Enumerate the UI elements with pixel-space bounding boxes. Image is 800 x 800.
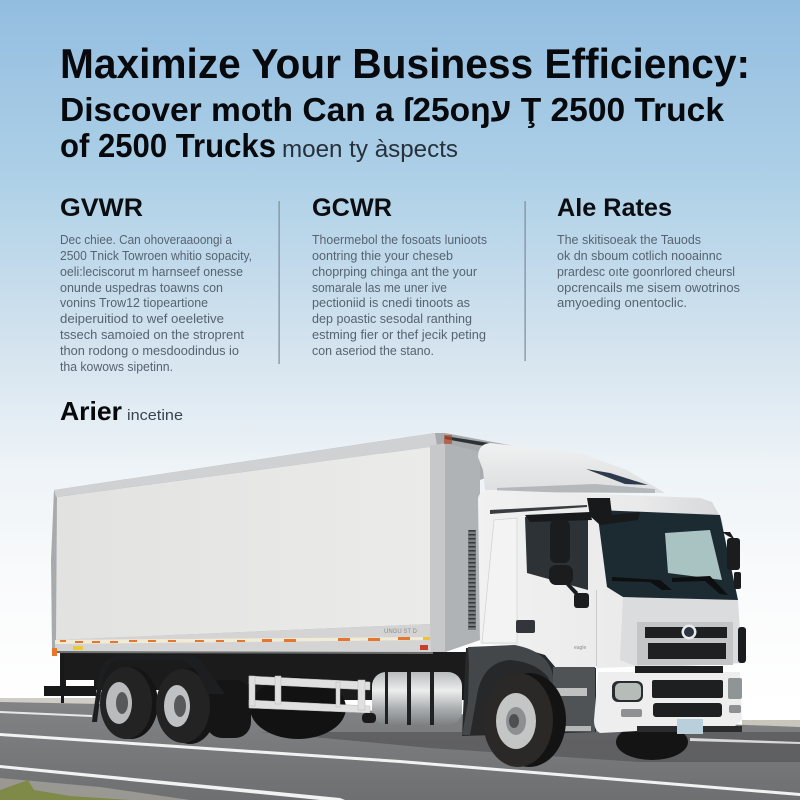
model text: eagle: [574, 645, 586, 651]
column: GCWR: estming fier or thef jecik peting: [312, 328, 486, 342]
column: Ale Rates: ok dn sboum cotlich nooainnc: [557, 249, 722, 263]
front wheel: [483, 673, 566, 767]
column: GVWR: GVWR: [60, 194, 143, 222]
rear fender: [92, 655, 225, 722]
column: Ale Rates: [557, 194, 740, 310]
column: Ale Rates: opcrencails me sisem owotrinos: [557, 281, 740, 295]
title: [60, 40, 750, 164]
door handle: [516, 620, 535, 633]
cab: [478, 443, 746, 668]
roof fairing: [478, 443, 665, 493]
column: GCWR: con aseriod the stano.: [312, 344, 434, 358]
subheading: Arier incetine: [60, 396, 183, 426]
column: GCWR: choprping chinga ant the your: [312, 265, 477, 279]
column: GVWR: onunde uspedras toawns con: [60, 281, 223, 295]
column: GCWR: Thoermebol the fosoats lunioots: [312, 233, 487, 247]
title: moen ty àspects: [282, 136, 458, 163]
column: GVWR: vonins Trow12 tiopeartione: [60, 296, 208, 310]
column: Ale Rates: The skitisoeak the Tauods: [557, 233, 701, 247]
grille: [637, 622, 733, 665]
column: GVWR: tssech samoied on the stroprent: [60, 328, 245, 342]
column: GVWR: tha kowows sipetinn.: [60, 360, 173, 374]
side mirrors: [549, 520, 746, 663]
fuel tank: [362, 672, 462, 725]
subheading: Arier incetine: Arier: [60, 396, 122, 426]
divider 1: [278, 201, 280, 364]
door window: [525, 517, 588, 590]
column: GCWR: somarale las me uner ive: [312, 281, 447, 295]
marker lights: [52, 637, 410, 656]
column: GVWR: [60, 194, 252, 374]
bumper: [594, 666, 742, 734]
divider 2: [524, 201, 526, 361]
column: Ale Rates: amyoeding onentoclic.: [557, 296, 687, 310]
roof visor: [525, 498, 738, 545]
column: GCWR: GCWR: [312, 194, 392, 222]
rear axle chassis: [44, 652, 470, 739]
windshield: [597, 510, 738, 600]
title: Maximize Your Business Efficiency:: [60, 40, 750, 87]
cargo box: UNGU ST D: [384, 629, 418, 635]
column: GCWR: [312, 194, 487, 358]
cargo box: [51, 433, 552, 656]
wheel arch and step: [462, 645, 596, 736]
rear wheels: [100, 667, 217, 744]
column: Ale Rates: Ale Rates: [557, 194, 672, 222]
column: GVWR: thon rodong o mesdoodindus io: [60, 344, 239, 358]
column: GVWR: 2500 Tnick Towroen whitio sopacity,: [60, 249, 252, 263]
column: GVWR: Dec chiee. Can ohoveraaoongi a: [60, 233, 232, 247]
title: of 2500 Trucks: [60, 127, 276, 164]
truck: [44, 433, 746, 767]
column: GCWR: oontring thie your cheseb: [312, 249, 453, 263]
column: GCWR: dep poastic sesodal ranthing: [312, 312, 472, 326]
title: Discover moth Can a ſ25oŋע Ţ 2500 Truck: [60, 91, 725, 128]
road and ground: [0, 698, 800, 800]
cab body: [478, 490, 742, 668]
subheading: Arier incetine: incetine: [127, 407, 183, 424]
column: Ale Rates: prardesc oıte ɡoonrlored cheursl: [557, 265, 735, 279]
column: GCWR: pectioniid is cnedi tinoots as: [312, 296, 470, 310]
side guard: [249, 676, 370, 713]
column: GVWR: deiperuitiod to wef oeeletive: [60, 312, 224, 326]
column: GVWR: oeli:leciscorut m harnseef onesse: [60, 265, 243, 279]
second front wheel: [616, 724, 688, 760]
